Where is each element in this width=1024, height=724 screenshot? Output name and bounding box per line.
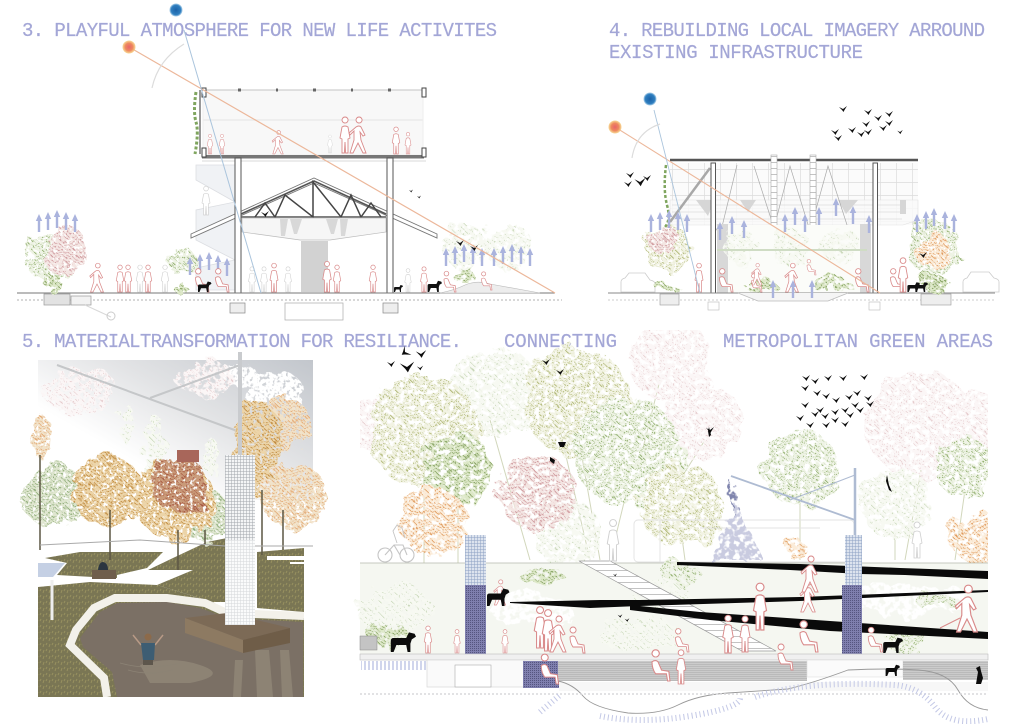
existing pitched roof truss [191, 178, 437, 240]
people on ground [90, 261, 492, 292]
steel columns [235, 158, 393, 293]
grey people [607, 520, 922, 561]
dogs and birds [198, 190, 478, 292]
icon: sun [122, 40, 136, 54]
cloud dabs [222, 365, 305, 412]
flock right [796, 374, 874, 428]
dogs and birds [624, 106, 928, 292]
ground line [608, 293, 995, 310]
hill right [257, 548, 304, 612]
cars [621, 272, 999, 292]
title: section 4 [609, 20, 985, 64]
main trees [368, 346, 1004, 564]
sky [38, 360, 313, 500]
black water channels [510, 562, 988, 639]
red outline people [424, 556, 977, 684]
tree: left [26, 228, 88, 294]
panel: section 3 building cross-section [17, 4, 562, 320]
blue infiltration marks [540, 684, 988, 721]
autumn trees [21, 397, 328, 541]
diagonal brace [670, 168, 710, 222]
green wall [665, 165, 669, 227]
panel: section 4 section drawing [608, 92, 999, 310]
ground line and foundations [17, 293, 562, 320]
garden interior [717, 224, 871, 293]
panel: material transformation perspective image [21, 352, 328, 697]
columns [711, 163, 878, 293]
people upstairs [207, 117, 411, 154]
panel: connecting metropolitan green areas section [346, 318, 1004, 721]
dogs [391, 588, 983, 684]
trunks [424, 380, 966, 563]
suspended structure [670, 155, 918, 235]
icon: moon [170, 4, 182, 16]
upper pavilion [200, 88, 426, 161]
left tower [465, 535, 486, 655]
blue pane [38, 563, 65, 577]
forest canopy [360, 330, 988, 563]
lamp pole [731, 468, 855, 570]
white curb [70, 598, 304, 697]
title: section 5: 5. MATERIALTRANSFORMATION FOR RESILIANCE. [22, 331, 462, 353]
right tower [842, 535, 862, 655]
mound and trees right [440, 223, 540, 293]
pavement and underground [360, 654, 988, 713]
hill centre [148, 538, 227, 602]
far meadow left [45, 552, 163, 578]
green wall [194, 92, 197, 154]
sun path lines [129, 30, 555, 293]
central core [301, 241, 328, 292]
tree: left [643, 224, 691, 292]
pale background trees [360, 330, 988, 563]
icon: moon [644, 92, 656, 106]
staircase [579, 561, 776, 651]
title: metropolitan green areas: METROPOLITAN GREEN AREAS [723, 331, 993, 353]
central gabion tower [225, 352, 255, 625]
steel beams [57, 365, 240, 432]
tree: right [907, 221, 961, 292]
dog walk leash [940, 618, 960, 628]
tree trunks [40, 455, 283, 620]
child in water [120, 634, 180, 673]
midground planting band [357, 562, 988, 655]
background bus outline [634, 520, 854, 562]
platform [185, 613, 290, 653]
lower ground [38, 582, 304, 697]
horizon line [40, 540, 313, 546]
bench and sitter [92, 562, 116, 579]
people [695, 258, 908, 292]
white strips [267, 556, 304, 564]
perched birds [550, 427, 892, 622]
fountain mist [709, 482, 765, 560]
arrows [648, 198, 957, 298]
icon: sun [608, 120, 622, 134]
birds top left [387, 345, 564, 375]
cyclist [378, 525, 414, 562]
title: section 3: 3. PLAYFUL ATMOSPHERE FOR NEW LIFE ACTIVITES [22, 20, 497, 42]
pond water [80, 602, 303, 697]
people in grey [136, 135, 411, 292]
building glimpse [177, 450, 199, 462]
title: section 4: EXISTING INFRASTRUCTURE [609, 42, 863, 64]
upward air flow arrows [36, 210, 533, 276]
title: connecting: CONNECTING [504, 331, 617, 353]
dangling foliage [42, 360, 235, 486]
sun lines [615, 110, 880, 293]
stair tower [196, 165, 235, 290]
title: section 4: 4. REBUILDING LOCAL IMAGERY ARROUND [609, 20, 985, 42]
bench [360, 636, 377, 650]
tree: small centre [169, 248, 197, 294]
